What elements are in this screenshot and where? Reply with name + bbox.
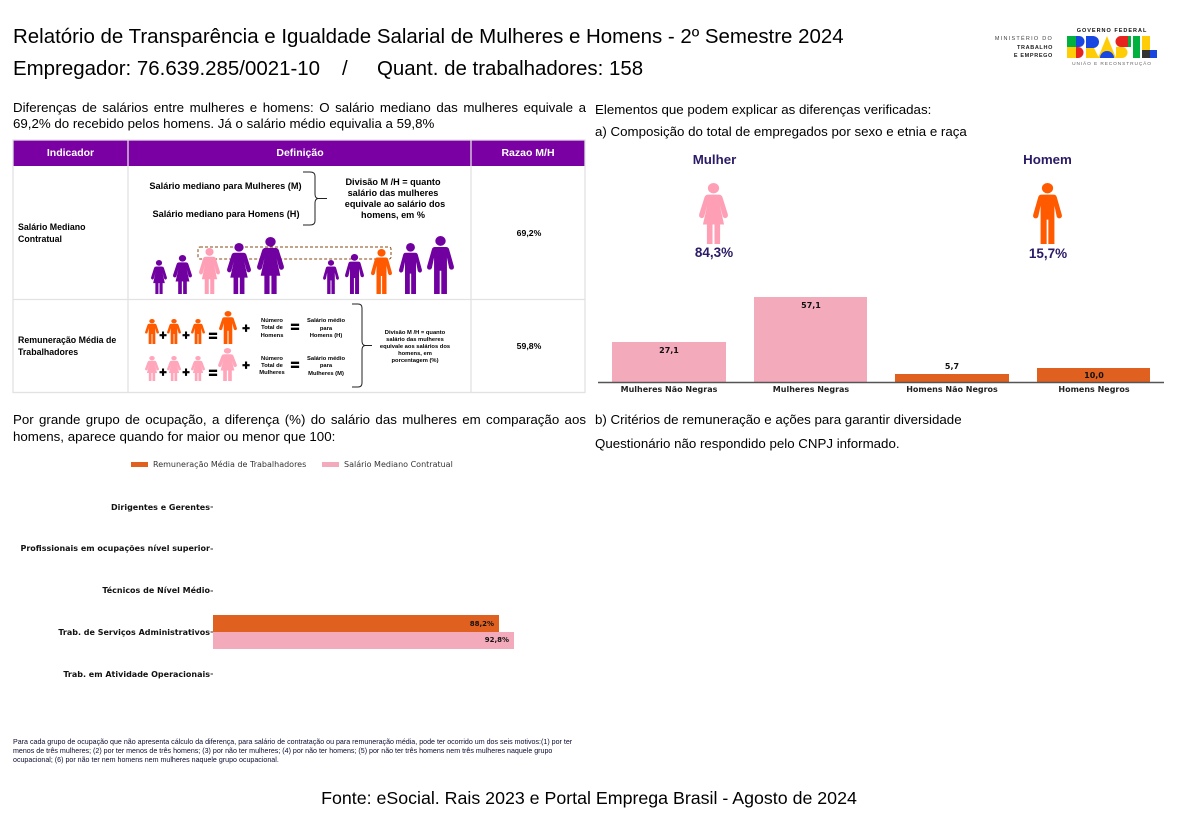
division explanation: homens, em % xyxy=(361,210,425,220)
woman share: 84,3% xyxy=(695,245,733,260)
footnote: menos de três mulheres; (2) por ter menos de três homens; (3) por não ter mulheres; (4) por não ter homens; (5) por não ter três homens nem três mulheres naquele grupo xyxy=(13,747,552,755)
source: Fonte: eSocial. Rais 2023 e Portal Emprega Brasil - Agosto de 2024 xyxy=(321,788,857,808)
category labels: Profissionais em ocupações nível superior xyxy=(20,544,210,553)
formula text: homens xyxy=(261,318,345,339)
logos: ministério and governo federal xyxy=(995,28,1157,67)
math operators: + xyxy=(242,358,250,372)
axis xyxy=(598,382,1164,384)
formula text: mulheres: para xyxy=(320,363,333,369)
math operators: = xyxy=(291,357,300,374)
women figures xyxy=(151,237,284,294)
ministério text xyxy=(995,35,1053,59)
woman share: Mulher xyxy=(693,152,736,167)
division explanation: Divisão M /H = quanto xyxy=(345,177,441,187)
category labels: Mulheres Negras xyxy=(773,385,849,394)
category labels: Homens Não Negros xyxy=(906,385,998,394)
value labels: 27,1 xyxy=(659,346,679,355)
category labels: Técnicos de Nível Médio xyxy=(102,585,210,595)
formula labels: mediano xyxy=(149,181,302,219)
category labels: Mulheres Não Negras xyxy=(621,385,718,394)
employer line: Quant. de trabalhadores: 158 xyxy=(377,57,643,80)
division explanation: salário das mulheres xyxy=(348,188,438,198)
man share xyxy=(1023,152,1072,261)
row label: remuneração média xyxy=(18,335,116,357)
division explanation: equivale ao salário dos xyxy=(345,199,445,209)
ratio: mediano: 69,2% xyxy=(517,228,542,238)
value labels xyxy=(470,620,509,644)
ratio: média: 59,8% xyxy=(517,341,542,351)
note: questionnaire: Questionário não respondido pelo CNPJ informado. xyxy=(595,436,900,451)
math operators: + xyxy=(242,320,250,336)
formula text: homens: Salário médio xyxy=(307,318,345,324)
formula text: mulheres: Número xyxy=(261,356,283,362)
row label: salário mediano: Contratual xyxy=(18,234,62,244)
formula labels: mediano: Salário mediano para Homens (H) xyxy=(152,209,300,219)
formula text: homens: Número xyxy=(261,318,283,324)
união e reconstrução text: UNIÃO E RECONSTRUÇÃO xyxy=(1072,60,1152,67)
formula text: mulheres: Total de xyxy=(261,363,284,369)
formula text: mulheres: Salário médio xyxy=(307,356,345,362)
category labels: Dirigentes e Gerentes xyxy=(111,503,210,512)
employer line xyxy=(13,57,643,80)
division explanation: média: porcentagem (%) xyxy=(391,358,439,364)
division explanation: média xyxy=(380,330,450,364)
men figures xyxy=(323,236,454,294)
table header: Indicador xyxy=(47,147,94,159)
category labels xyxy=(20,503,210,679)
math operators: = xyxy=(291,319,300,336)
ministério text: MINISTÉRIO DO xyxy=(995,35,1053,42)
ministério text: TRABALHO xyxy=(1017,45,1053,51)
heading: explanatory elements: Elementos que podem explicar as diferenças verificadas: xyxy=(595,102,931,117)
title: Relatório de Transparência e Igualdade Salarial de Mulheres e Homens - 2º Semestre 2024 xyxy=(13,25,844,48)
footnote xyxy=(13,738,572,764)
value labels: 88,2% xyxy=(470,620,494,628)
dashed median highlight xyxy=(198,247,391,259)
division explanation: média: Divisão M /H = quanto xyxy=(385,330,446,336)
formula text: mulheres xyxy=(259,356,345,377)
occupation paragraph: Por grande grupo de ocupação, a diferença (%) do salário das mulheres em comparação aos homens, aparece quando for maior ou menor que 100: xyxy=(13,412,586,444)
formula text: mulheres: Mulheres (M) xyxy=(308,371,344,377)
bars xyxy=(213,615,514,649)
math operators: = xyxy=(209,365,218,382)
table header: Definição xyxy=(276,147,324,159)
formula text: homens: para xyxy=(320,326,333,332)
math operators: + xyxy=(159,328,167,342)
row label: salário mediano: Salário Mediano xyxy=(18,222,86,232)
table header xyxy=(13,140,585,166)
man share: 15,7% xyxy=(1029,246,1067,261)
ministério text: E EMPREGO xyxy=(1014,53,1053,59)
footnote: Para cada grupo de ocupação que não apresenta cálculo da diferença, para salário de contratação ou para remuneração média, pode ter ocorrido um dos seis motivos:(1) por ter xyxy=(13,738,572,746)
formula labels: mediano: Salário mediano para Mulheres (M) xyxy=(149,181,302,191)
row label: remuneração média: Remuneração Média de xyxy=(18,335,116,345)
math operators: = xyxy=(209,328,218,345)
category labels xyxy=(621,385,1130,394)
legend: Salário Mediano Contratual xyxy=(344,460,453,469)
large curly brace xyxy=(352,304,372,387)
math operators xyxy=(159,319,300,382)
value labels: 92,8% xyxy=(485,636,509,644)
footnote: ocupacional; (6) por não ter nem homens nem mulheres naquele grupo ocupacional. xyxy=(13,756,279,764)
woman share xyxy=(693,152,736,260)
subheading: composition: a) Composição do total de empregados por sexo e etnia e raça xyxy=(595,124,967,139)
value labels: 10,0 xyxy=(1084,371,1104,380)
legend: Remuneração Média de Trabalhadores xyxy=(153,459,306,469)
intro paragraph: salary differences: Diferenças de salários entre mulheres e homens: O salário mediano das mulheres equivale a 69,2% do recebido pelos homens. Já o salário médio equivalia a 59,8% xyxy=(13,100,586,131)
panel: indicator table xyxy=(12,139,586,394)
formula text: mulheres: Mulheres xyxy=(259,370,285,376)
math operators: + xyxy=(182,366,190,380)
value labels: 5,7 xyxy=(945,362,959,371)
employer line: Empregador: 76.639.285/0021-10 xyxy=(13,57,320,80)
brasil mark xyxy=(1067,36,1157,58)
row label: salário mediano xyxy=(18,222,86,244)
employer line: / xyxy=(342,57,348,80)
category labels: Trab. em Atividade Operacionais xyxy=(63,670,210,679)
bar chart: occupation groups xyxy=(20,459,514,679)
formula text: homens: Homens (H) xyxy=(310,333,342,339)
value labels: 57,1 xyxy=(801,301,821,310)
governo federal text: GOVERNO FEDERAL xyxy=(1077,28,1147,34)
table header: Razao M/H xyxy=(501,147,555,159)
formula text: homens: Homens xyxy=(261,333,283,339)
bars xyxy=(612,297,1150,382)
division explanation: média: equivale aos salários dos xyxy=(380,344,450,350)
row label: remuneração média: Trabalhadores xyxy=(18,347,78,357)
men sum formula xyxy=(145,311,237,344)
math operators: + xyxy=(159,366,167,380)
value labels xyxy=(659,301,1104,380)
legend xyxy=(131,459,453,469)
heading: remuneration criteria: b) Critérios de remuneração e ações para garantir diversidade xyxy=(595,412,962,427)
division explanation: média: homens, em xyxy=(398,351,432,357)
division explanation xyxy=(345,177,445,220)
bar chart: composition by sex and race xyxy=(598,297,1164,394)
formula text: homens: Total de xyxy=(261,325,284,331)
man share: Homem xyxy=(1023,152,1072,167)
math operators: + xyxy=(182,328,190,342)
women sum formula xyxy=(145,348,237,381)
category labels: Trab. de Serviços Administrativos xyxy=(58,628,210,637)
curly brace xyxy=(303,172,327,225)
category labels: Homens Negros xyxy=(1058,385,1130,394)
division explanation: média: salário das mulheres xyxy=(386,337,444,343)
